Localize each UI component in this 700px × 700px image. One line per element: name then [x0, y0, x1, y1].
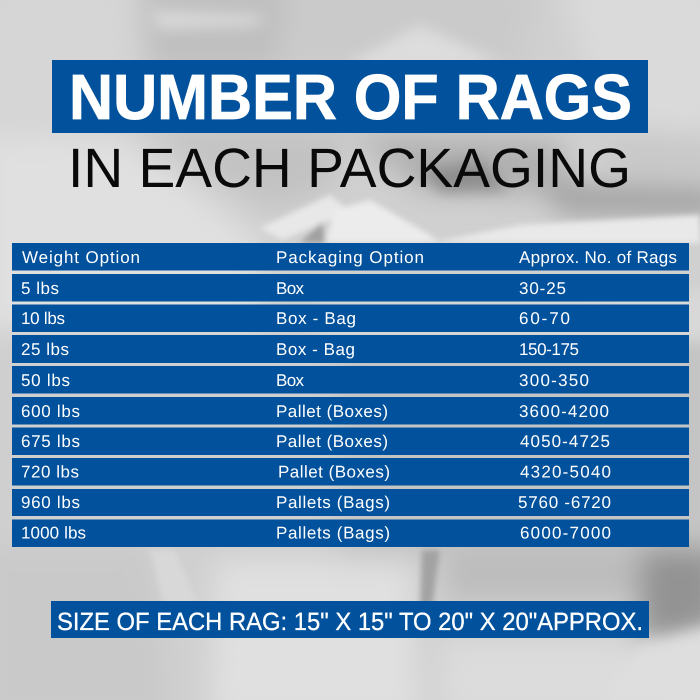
row: 5 lbs: Box	[276, 279, 304, 298]
row: 50 lbs: Box	[276, 371, 304, 390]
row: 10 lbs	[12, 304, 689, 332]
title banner	[52, 60, 648, 133]
row: 960 lbs: 960 lbs	[21, 493, 80, 512]
row: 675 lbs: Pallet (Boxes)	[276, 432, 388, 451]
row: 600 lbs: 3600-4200	[519, 402, 609, 421]
row: 720 lbs: 720 lbs	[21, 462, 79, 482]
row: 960 lbs	[12, 489, 689, 516]
table header row	[12, 243, 689, 270]
title text: number of rags: NUMBER OF RAGS	[69, 61, 632, 133]
row: 50 lbs: 300-350	[519, 371, 589, 390]
row: 960 lbs: Pallets (Bags)	[276, 493, 390, 512]
row: 675 lbs: 675 lbs	[21, 432, 80, 451]
row: 1000 lbs	[12, 520, 689, 547]
footer banner: rag size	[51, 601, 649, 638]
row: 50 lbs: 50 lbs	[21, 371, 70, 390]
row: 600 lbs: 600 lbs	[21, 402, 80, 421]
table header row: Approx. No. of Rags	[519, 248, 677, 267]
row: 25 lbs: Box - Bag	[276, 340, 355, 359]
row: 10 lbs: 10 lbs	[21, 309, 65, 328]
row: 5 lbs: 5 lbs	[21, 279, 59, 298]
row: 1000 lbs: Pallets (Bags)	[276, 524, 390, 542]
row: 25 lbs	[12, 335, 689, 363]
row: 675 lbs: 4050-4725	[520, 432, 610, 451]
footer text: SIZE OF EACH RAG: 15" X 15" TO 20" X 20"APPROX.	[57, 608, 643, 636]
row: 1000 lbs: 6000-7000	[520, 524, 611, 542]
row: 960 lbs: 5760 -6720	[518, 493, 611, 512]
row: 10 lbs: 60-70	[519, 309, 570, 328]
row: 25 lbs: 25 lbs	[21, 340, 69, 359]
subtitle: IN EACH PACKAGING	[68, 137, 631, 199]
row: 720 lbs: 4320-5040	[520, 462, 611, 482]
row: 1000 lbs: 1000 lbs	[21, 524, 86, 542]
table header row: Weight Option	[22, 248, 140, 267]
table header row: Packaging Option	[276, 248, 424, 267]
row: 600 lbs	[12, 397, 689, 424]
row: 5 lbs: 30-25	[519, 279, 566, 298]
row: 720 lbs: Pallet (Boxes)	[278, 462, 390, 482]
row: 10 lbs: Box - Bag	[276, 309, 356, 328]
row: 720 lbs	[12, 458, 689, 486]
row: 675 lbs	[12, 428, 689, 455]
row: 5 lbs	[12, 274, 689, 302]
table: rags per packaging	[12, 243, 689, 547]
row: 600 lbs: Pallet (Boxes)	[276, 402, 388, 421]
row: 25 lbs: 150-175	[519, 340, 579, 359]
row: 50 lbs	[12, 366, 689, 394]
